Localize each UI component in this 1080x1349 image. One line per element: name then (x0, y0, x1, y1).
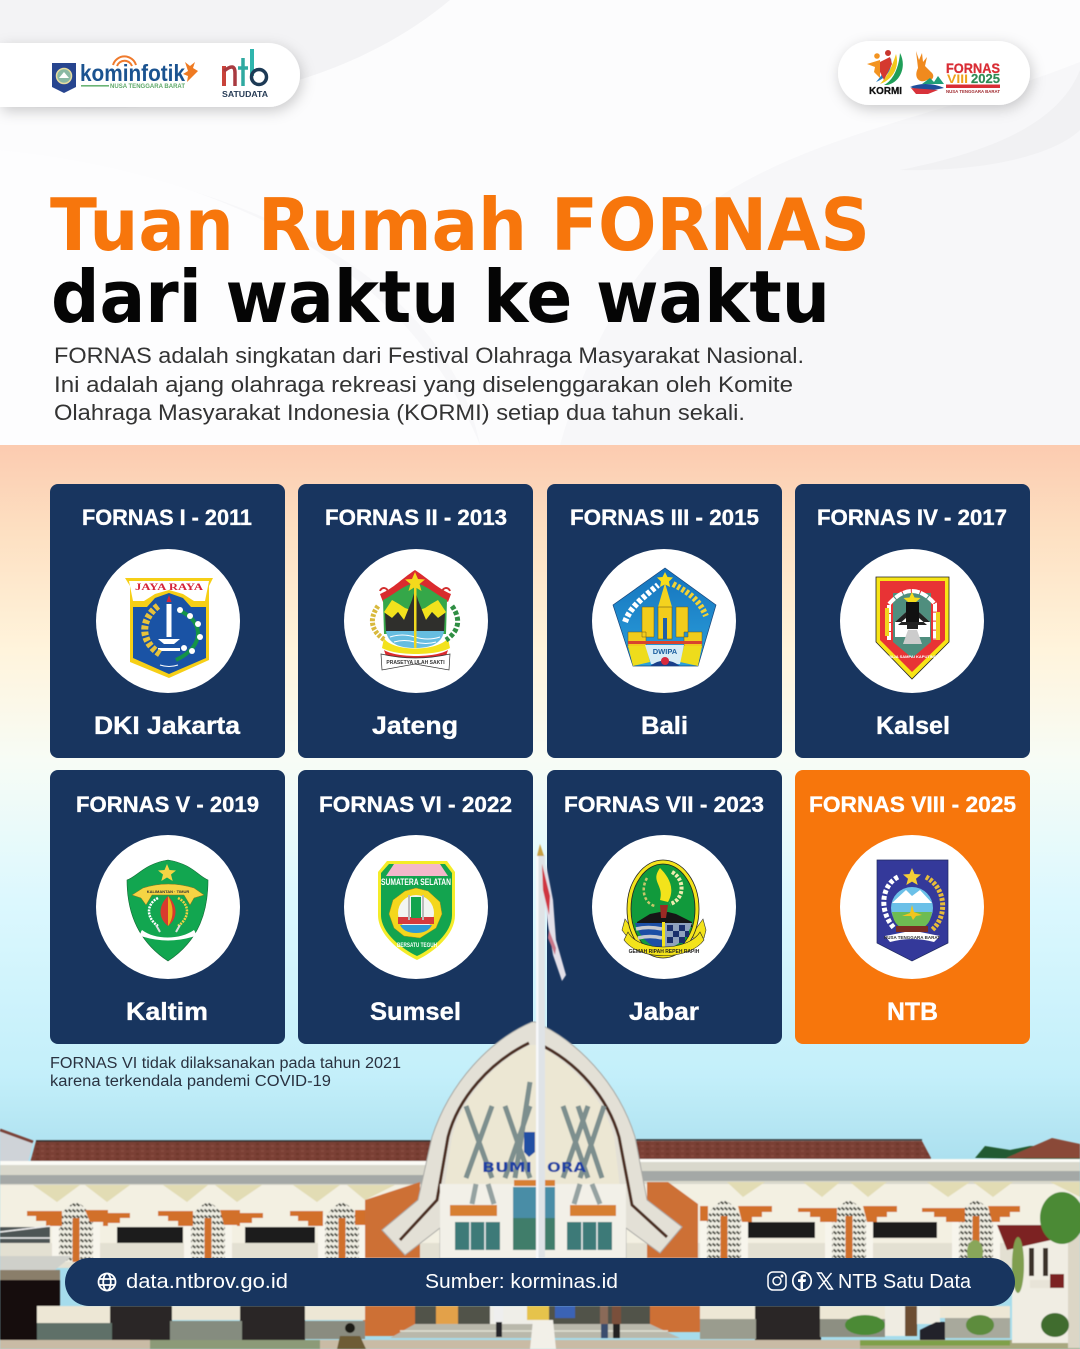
emblem: Jateng (372, 570, 458, 670)
card: FORNAS VIII NTB (highlighted): FORNAS VIII - 2025 (809, 792, 1016, 817)
top white background (0, 0, 1080, 445)
emblem: Sumsel (378, 861, 455, 960)
card: FORNAS I DKI Jakarta (50, 484, 285, 758)
ntb satu data logo (222, 49, 268, 99)
card: FORNAS I DKI Jakarta: FORNAS I - 2011 (82, 505, 252, 530)
card: FORNAS VIII NTB (highlighted) (795, 770, 1030, 1044)
kominfotik logo: NUSA TENGGARA BARAT (110, 84, 185, 90)
card: FORNAS IV Kalsel (795, 484, 1030, 758)
emblem: Kalsel (876, 577, 949, 679)
emblem: NTB (877, 860, 948, 961)
emblem: Sumsel: SUMATERA SELATAN (381, 877, 451, 887)
side pavilion (997, 1225, 1080, 1348)
emblem: Kalsel: WAJA SAMPAI KAPUTING (887, 654, 937, 659)
title (50, 183, 870, 339)
emblem: Kaltim: KALIMANTAN · TIMUR (147, 889, 189, 894)
card: FORNAS II Jateng: FORNAS II - 2013 (325, 505, 507, 530)
KORMI logo: KORMI (869, 86, 902, 97)
card: FORNAS VII Jabar (547, 770, 782, 1044)
emblem: Jabar (622, 860, 706, 958)
frieze (33, 1182, 1080, 1202)
KORMI logo (867, 50, 903, 97)
footnote: FORNAS VI tidak dilaksanakan pada tahun 2021 (50, 1055, 401, 1072)
orange brackets (27, 1206, 1020, 1226)
emblem: Bali: DWIPA (653, 647, 678, 656)
FORNAS VIII 2025 wordmark: VIII (947, 72, 968, 86)
card: FORNAS IV Kalsel: FORNAS IV - 2017 (817, 505, 1007, 530)
building sign: BUMI (482, 1161, 532, 1176)
card: FORNAS III Bali: Bali (641, 712, 688, 740)
icon: X (818, 1273, 832, 1289)
card: FORNAS VI Sumsel: Sumsel (370, 998, 461, 1026)
eave (0, 1159, 1080, 1185)
card: FORNAS VI Sumsel: FORNAS VI - 2022 (319, 792, 512, 817)
card: FORNAS VI Sumsel (298, 770, 533, 1044)
entrance gable (382, 1022, 682, 1258)
lower facade (440, 1184, 626, 1258)
intro text: Olahraga Masyarakat Indonesia (KORMI) setiap dua tahun sekali. (54, 400, 745, 425)
wall (0, 1184, 1080, 1268)
icon: facebook (793, 1272, 811, 1290)
footer bar (65, 1258, 1015, 1306)
source: Sumber: korminas.id (425, 1271, 618, 1293)
emblem: Sumsel: BERSATU TEGUH (397, 943, 437, 949)
card: FORNAS IV Kalsel: Kalsel (876, 712, 950, 740)
footnote (50, 1055, 401, 1090)
card: FORNAS V Kaltim (50, 770, 285, 1044)
emblem: Bali (613, 568, 716, 666)
lattice pillars (52, 1200, 1000, 1262)
emblem: Jateng: PRASETYA ULAH SAKTI (386, 660, 445, 666)
steps and ground (0, 1324, 1080, 1349)
FORNAS VIII 2025 wordmark: FORNAS (946, 60, 1000, 76)
kominfotik logo: kominfotik (80, 60, 185, 86)
building sign: ORA (547, 1161, 586, 1176)
people on the steps (337, 1306, 621, 1349)
social handle: NTB Satu Data (838, 1271, 972, 1293)
roof (0, 1130, 931, 1163)
FORNAS VIII 2025 wordmark: NUSA TENGGARA BARAT (946, 89, 1000, 94)
FORNAS VIII 2025 wordmark (946, 60, 1000, 94)
building photo (0, 844, 1080, 1349)
card: FORNAS V Kaltim: FORNAS V - 2019 (76, 792, 259, 817)
footnote: karena terkendala pandemi COVID-19 (50, 1073, 331, 1090)
emblem: Kaltim (127, 860, 208, 961)
card: FORNAS II Jateng (298, 484, 533, 758)
card: FORNAS I DKI Jakarta: DKI Jakarta (94, 712, 241, 740)
emblem: DKI Jakarta: JAYA RAYA (135, 583, 203, 593)
header pill: government logos (0, 43, 300, 107)
background trees and far roof (975, 1138, 1080, 1160)
card: FORNAS VII Jabar: Jabar (629, 998, 699, 1026)
lower storey (0, 1256, 1010, 1349)
intro text: FORNAS adalah singkatan dari Festival Olahraga Masyarakat Nasional. (54, 343, 804, 368)
card: FORNAS III Bali (547, 484, 782, 758)
icon: NTB shield (52, 63, 76, 93)
intro text (54, 343, 804, 425)
title: Tuan Rumah FORNAS (50, 183, 870, 267)
emblem: Jabar: GEMAH RIPAH REPEH RAPIH (629, 949, 700, 955)
icon: globe (98, 1274, 116, 1290)
intro text: Ini adalah ajang olahraga rekreasi yang diselenggarakan oleh Komite (54, 372, 793, 397)
orange wall panels (363, 1182, 700, 1336)
title: dari waktu ke waktu (51, 255, 830, 339)
card: FORNAS III Bali: FORNAS III - 2015 (570, 505, 759, 530)
ntb satu data logo: SATUDATA (222, 90, 268, 99)
FORNAS deer logo (910, 51, 944, 94)
card: FORNAS VII Jabar: FORNAS VII - 2023 (564, 792, 764, 817)
building sign (482, 1132, 586, 1176)
facade X strips (466, 1082, 604, 1178)
flag pole and flag (536, 844, 566, 1260)
windows (0, 1222, 937, 1243)
trees (845, 1192, 1080, 1337)
card: FORNAS II Jateng: Jateng (372, 712, 458, 740)
emblem: NTB: NUSA TENGGARA BARAT (884, 935, 940, 940)
website: data.ntbrov.go.id (126, 1271, 288, 1293)
card: FORNAS V Kaltim: Kaltim (126, 998, 208, 1026)
icon: instagram (768, 1272, 786, 1290)
card: FORNAS VIII NTB (highlighted): NTB (887, 998, 938, 1026)
emblem: DKI Jakarta (125, 578, 213, 678)
header pill: FORNAS VIII logos (838, 41, 1030, 105)
FORNAS VIII 2025 wordmark: 2025 (971, 72, 1000, 86)
gradient sky background (0, 445, 1080, 1349)
